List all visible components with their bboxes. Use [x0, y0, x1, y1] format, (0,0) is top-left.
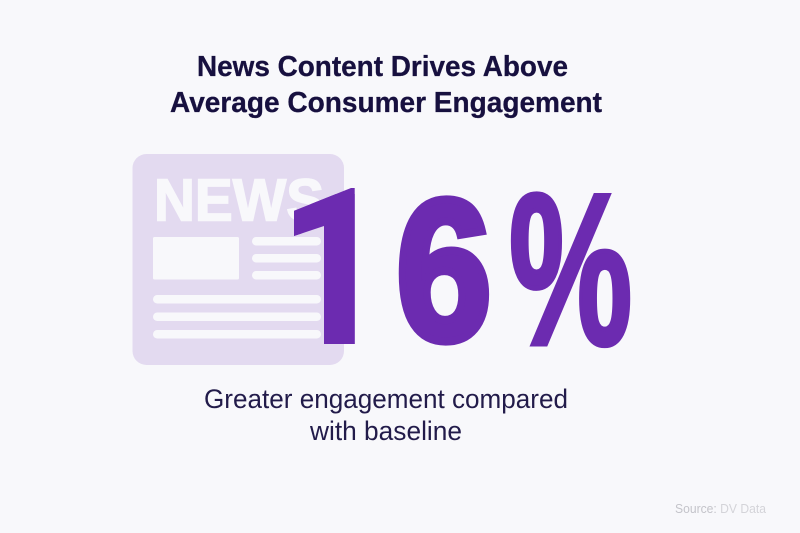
description — [204, 384, 568, 446]
title: Average Consumer Engagement — [170, 87, 602, 119]
description: Greater engagement compared — [204, 384, 568, 414]
title: News Content Drives Above — [197, 51, 568, 83]
big statistic: 16%: % — [509, 150, 632, 390]
icon: newspaper: NEWS — [154, 168, 324, 234]
big statistic: 16%: 1 — [272, 148, 399, 391]
description: with baseline — [309, 416, 462, 446]
icon: newspaper — [132, 154, 344, 365]
title — [170, 51, 602, 119]
big statistic: 16% — [294, 188, 630, 348]
big statistic: 16%: 6 — [396, 158, 492, 382]
source: Source: DV Data — [675, 502, 766, 516]
